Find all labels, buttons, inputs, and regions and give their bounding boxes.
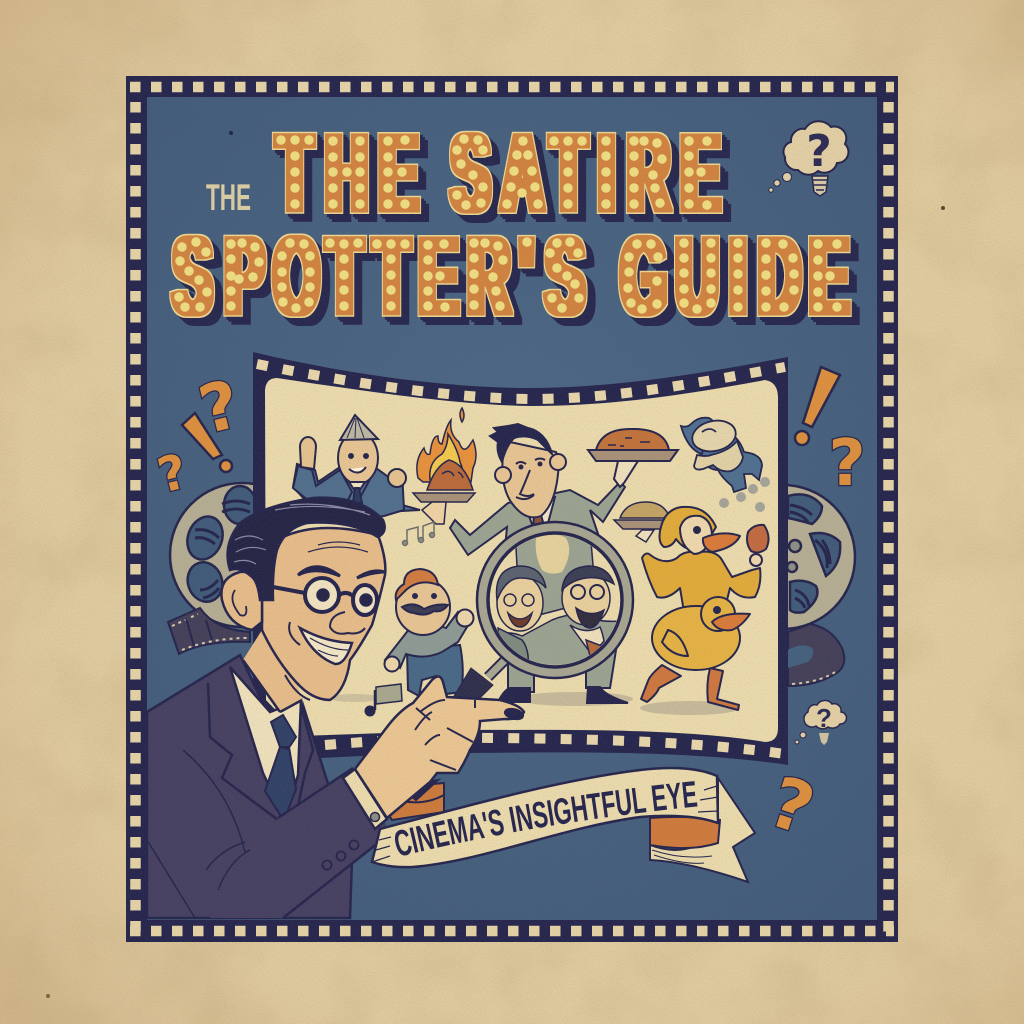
character: duck woman [640, 507, 769, 715]
banner body [372, 768, 718, 867]
banner fold and tail [650, 778, 755, 882]
icon: small thought cloud lightbulb: ? [816, 703, 832, 733]
man: neck and face [221, 498, 385, 712]
icon: small thought cloud lightbulb [795, 700, 847, 745]
second dish on plate [614, 502, 676, 542]
smiling mouth [300, 628, 352, 664]
icon: left orange question mark large: ? [192, 365, 247, 449]
icon: right orange question mark: ? [828, 427, 866, 501]
title letters: THE SATIRE [277, 111, 720, 235]
man: pointing hand [355, 676, 524, 818]
film reel: left [170, 483, 314, 627]
film tail: left [168, 608, 250, 654]
hair [228, 498, 385, 600]
banner text: CINEMA'S INSIGHTFUL EYE [394, 781, 698, 856]
music notes small [402, 522, 434, 546]
character: mustached short man [384, 569, 474, 696]
fallen music note [330, 684, 402, 716]
tie [265, 715, 296, 821]
ribbon banner: Cinema's Insightful Eye [370, 766, 756, 884]
icon: thought cloud lightbulb [769, 121, 848, 196]
magnifying glass [451, 522, 633, 703]
ear [221, 572, 262, 630]
sleeve buttons [322, 840, 358, 870]
title letters [173, 111, 848, 338]
icon: left orange exclamation [182, 413, 232, 472]
film reel: right [711, 485, 855, 629]
eyebrows [298, 567, 385, 578]
character: elephant-like figure [681, 417, 762, 492]
duck woman torso and arms [642, 552, 760, 612]
icon: thought cloud lightbulb: ? [806, 126, 832, 177]
pie on plate held aloft [588, 429, 678, 487]
shirt [230, 667, 301, 820]
marquee light bulbs [179, 139, 837, 309]
curved film strip screen [253, 352, 788, 765]
flaming dish on plate [413, 408, 476, 524]
small heading: THE: THE [206, 177, 251, 218]
glasses and eyes [305, 578, 339, 612]
icon: left orange question mark small: ? [152, 443, 193, 504]
title: The Satire Spotter's Guide marquee lettering [173, 111, 848, 338]
icon: lower orange question mark: ? [760, 761, 824, 851]
jacket sleeve [210, 768, 387, 918]
nose [330, 612, 365, 634]
poster frame: film border [126, 76, 898, 942]
man: shirt cuff [343, 769, 387, 829]
icon: right orange exclamation [795, 367, 840, 445]
character: big central man in grey suit [450, 424, 633, 706]
character: blue suit man with paper hat [293, 415, 420, 520]
film tail: right [788, 624, 844, 686]
title letters: SPOTTER'S GUIDE [173, 214, 848, 338]
lens contents: two laughing faces [496, 535, 617, 665]
ghost music notes [719, 477, 770, 512]
orange block under hand [382, 780, 444, 820]
man: suit jacket [147, 655, 387, 918]
